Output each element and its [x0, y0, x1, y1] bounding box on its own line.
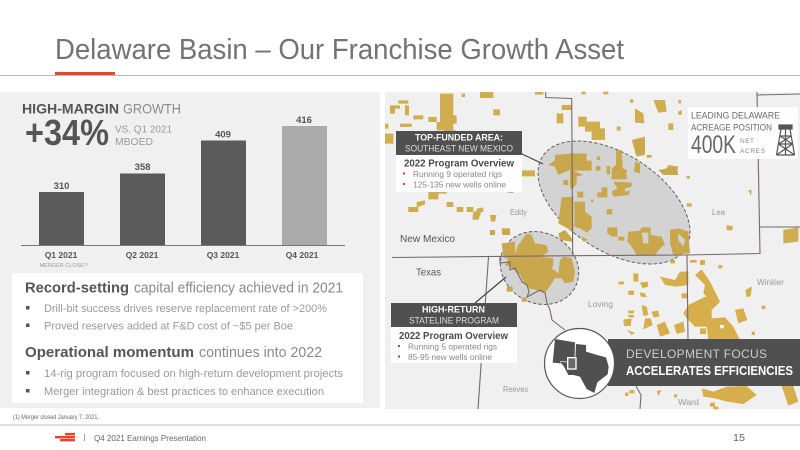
heading: operational momentum: continues into 2022	[199, 344, 322, 361]
heading: record-setting	[25, 280, 343, 296]
callout: top-funded area	[396, 131, 543, 192]
title	[0, 34, 800, 76]
bar chart: Q2 2021	[126, 250, 159, 260]
stat: +34%	[25, 112, 172, 153]
callout: leading acreage: ACRES	[740, 148, 766, 155]
footnote: (1) Merger closed January 7, 2021.	[13, 415, 99, 421]
callout: high-return stateline program: Running 5 operated rigs	[408, 342, 497, 352]
map labels: Reeves	[503, 385, 528, 394]
bar chart	[21, 115, 345, 269]
callout: top-funded area: 125-135 new wells online	[413, 180, 506, 190]
footer	[0, 424, 800, 444]
footer: Q4 2021 Earnings Presentation	[94, 433, 206, 443]
bullet list: momentum	[26, 368, 343, 398]
heading: operational momentum	[25, 344, 322, 361]
stat: +34%: MBOED	[115, 136, 153, 148]
callout: development focus: DEVELOPMENT FOCUS	[626, 347, 767, 361]
bullet list: efficiency	[26, 303, 327, 332]
map	[385, 92, 800, 409]
map labels: Eddy	[510, 208, 527, 217]
callout: high-return stateline program: 2022 Program Overview	[399, 330, 509, 342]
title: Delaware Basin – Our Franchise Growth Asset	[55, 34, 624, 66]
map labels	[400, 208, 784, 407]
callout: leading acreage	[688, 107, 798, 159]
map labels: Loving	[588, 300, 613, 309]
callout: high-return stateline program: 85-95 new wells online	[408, 352, 492, 362]
callout: high-return stateline program	[391, 277, 517, 363]
callout: top-funded area: SOUTHEAST NEW MEXICO	[405, 144, 513, 154]
bar chart: Q1 2021	[45, 250, 78, 260]
bullet list: momentum: Merger integration & best practices to enhance execution	[44, 386, 324, 398]
callout: leading acreage: NET	[740, 138, 754, 145]
icon: company logo	[55, 433, 75, 441]
callout: top-funded area: TOP-FUNDED AREA:	[415, 132, 503, 142]
heading: operational momentum: Operational momentum	[25, 344, 194, 361]
bar chart: Q3 2021	[207, 250, 240, 260]
text panel: highlights	[12, 273, 363, 403]
callout: high-return stateline program: STATELINE PROGRAM	[409, 316, 499, 326]
bullet list: momentum: 14-rig program focused on high-return development projects	[44, 368, 343, 380]
heading: high-margin growth	[22, 100, 181, 116]
heading: record-setting: Record-setting	[25, 280, 129, 296]
callout: development focus	[544, 328, 800, 398]
panel: high-margin growth	[0, 92, 380, 408]
bar chart: Q4 2021	[286, 250, 319, 260]
heading: record-setting: capital efficiency achieved in 2021	[134, 280, 343, 296]
gold acreage: south-east	[618, 260, 798, 409]
callout: top-funded area: Running 9 operated rigs	[413, 169, 502, 179]
callout: leading acreage: LEADING DELAWARE	[691, 110, 780, 122]
icon: oil derrick	[776, 125, 794, 155]
gold acreage: north and east	[472, 92, 798, 243]
stat: +34%: VS. Q1 2021	[115, 124, 172, 136]
map labels: New Mexico	[400, 234, 455, 245]
region: top-funded ellipse	[516, 116, 712, 289]
callout: top-funded area: 2022 Program Overview	[404, 158, 515, 170]
callout: leading acreage: 400K	[691, 131, 736, 159]
heading: high-margin growth: HIGH-MARGIN	[22, 100, 119, 116]
bar chart: 358	[135, 162, 150, 173]
bullet list: efficiency: Drill-bit success drives reserve replacement rate of >200%	[44, 303, 327, 315]
map labels: Lea	[712, 208, 726, 217]
boundaries	[392, 92, 800, 409]
callout: leading acreage: ACREAGE POSITION	[691, 122, 772, 134]
bar chart: MERGER CLOSE⁽¹⁾	[40, 262, 89, 269]
footer: 15	[733, 433, 745, 444]
heading: high-margin growth: GROWTH	[123, 100, 181, 116]
bar chart: 416	[296, 115, 312, 126]
map labels: Winkler	[757, 278, 784, 287]
bullet list: efficiency: Proved reserves added at F&D cost of ~$5 per Boe	[44, 320, 293, 332]
stat: +34%: +34%	[25, 112, 109, 153]
callout: high-return stateline program: HIGH-RETURN	[422, 304, 485, 314]
region: stateline ellipse	[487, 217, 592, 319]
icon: texas and new mexico locator	[544, 328, 614, 398]
bar chart: 409	[215, 130, 231, 140]
map labels: Texas	[416, 268, 441, 278]
bar chart: 310	[54, 181, 69, 192]
gold acreage: north-west	[385, 92, 543, 212]
map labels: Ward	[678, 398, 699, 407]
